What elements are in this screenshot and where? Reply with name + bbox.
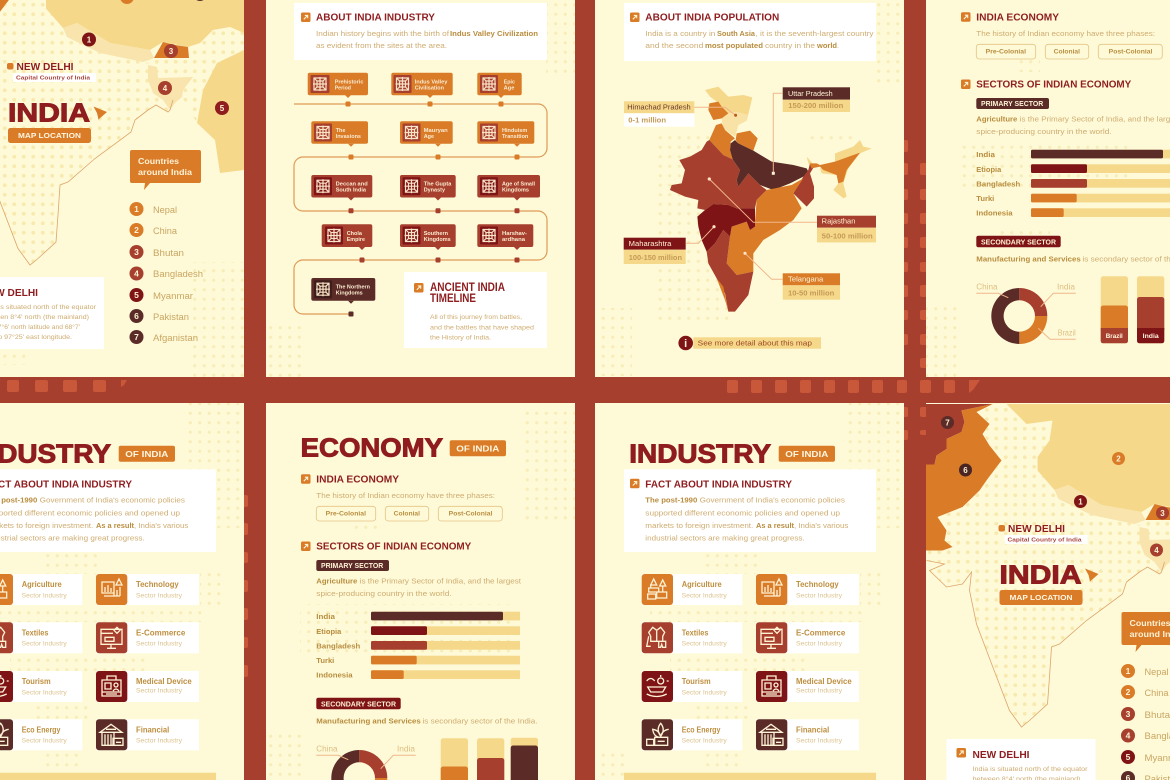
about population box: ABOUT INDIA POPULATION	[645, 12, 779, 24]
country list: Nepal	[1144, 667, 1168, 677]
fact box: , India's various	[134, 521, 189, 530]
card: Prehistoric Period: Prehistoric	[335, 79, 363, 85]
primary bar chart: Indonesia	[976, 209, 1013, 218]
primary sector	[976, 98, 1170, 136]
primary sector: Agriculture	[976, 115, 1017, 124]
primary bar chart: Etiopia	[316, 627, 342, 636]
country list: Myanmar	[153, 291, 193, 301]
card: Indus Valley	[391, 73, 453, 98]
sector cards	[642, 574, 859, 750]
panel: population	[595, 0, 904, 377]
secondary sector: SECONDARY SECTOR	[321, 701, 396, 708]
map markers: 3	[1160, 509, 1165, 518]
map markers: 6	[963, 466, 968, 475]
fact box: As a result	[96, 521, 135, 530]
panel: timeline	[266, 0, 575, 377]
label: Uttar Pradesh: 150-200 million	[788, 101, 844, 110]
donut chart	[976, 282, 1076, 344]
card: Chola Empire	[322, 224, 372, 250]
about population box: and the second	[645, 41, 703, 50]
card: Mauryan Age: Mauryan	[424, 128, 448, 134]
sector cards	[0, 574, 199, 750]
card: Chola Empire: Empire	[347, 237, 365, 243]
primary bar chart	[316, 612, 520, 680]
map markers: 1	[87, 36, 92, 44]
panel: industry left	[0, 403, 244, 780]
primary bar chart	[976, 150, 1170, 218]
label: Maharashtra	[624, 225, 716, 264]
country list: 1	[1126, 666, 1131, 676]
new delhi marker	[998, 523, 1088, 544]
india title: MAP LOCATION	[18, 131, 81, 140]
label: Telangana	[743, 252, 840, 300]
primary sector: spice-producing country in the world.	[316, 589, 452, 598]
new delhi marker: NEW DELHI	[1008, 523, 1065, 535]
primary sector: PRIMARY SECTOR	[981, 101, 1043, 108]
primary sector: spice-producing country in the world.	[976, 127, 1112, 136]
new delhi text box: India is situated north of the equator	[972, 766, 1088, 773]
card: Harshavardhana: ardhana	[502, 237, 526, 243]
ancient timeline box: TIMELINE	[430, 293, 476, 305]
new delhi marker: Capital Country of India	[1008, 538, 1083, 544]
primary sector: PRIMARY SECTOR	[321, 563, 383, 570]
donut chart	[316, 744, 416, 780]
country list: 4	[1126, 730, 1131, 740]
sector cards: Sector Industry	[796, 593, 842, 599]
sector cards: Eco Energy	[682, 726, 721, 735]
ancient timeline box: ANCIENT INDIA	[430, 282, 505, 294]
about population box: , it is the seventh-largest country	[756, 29, 874, 38]
secondary sector: Manufacturing and Services	[316, 717, 421, 726]
country list: 3	[134, 247, 139, 257]
donut chart: India	[397, 744, 416, 753]
sector cards: Eco Energy	[22, 726, 61, 735]
primary bar chart: Turki	[976, 194, 994, 203]
sector cards: Sector Industry	[22, 642, 67, 648]
sector cards: Sector Industry	[136, 593, 182, 599]
fact box: industrial sectors are making great progress.	[645, 534, 805, 543]
about industry box: ABOUT INDIA INDUSTRY	[316, 12, 435, 24]
card: Deccan and South India	[311, 175, 372, 200]
about population box: India is a country in	[645, 29, 715, 38]
donut chart: China	[976, 282, 998, 291]
card: The Gupta Dynasty: The Gupta	[424, 182, 452, 188]
country list: Bhutan	[153, 248, 184, 258]
map markers: 5	[220, 104, 225, 113]
about population box: country in the	[765, 41, 815, 50]
callout: countries: Countries	[1130, 618, 1170, 628]
label: Rajasthan: Rajasthan	[822, 219, 856, 226]
about industry box: as evident from the sites at the area.	[316, 41, 447, 50]
card: Hinduism Transition: Hinduism	[502, 128, 527, 134]
card: The Invasions: The	[336, 128, 345, 134]
map markers: 3	[169, 47, 174, 56]
sector cards: Financial	[136, 726, 169, 735]
india economy section	[301, 474, 502, 521]
sector cards: Medical Device	[796, 677, 852, 686]
callout: countries: Countries	[138, 156, 179, 166]
country list: Pakistan	[153, 312, 189, 322]
fact box: supported different economic policies and opened up	[645, 508, 840, 517]
fact box: As a result	[756, 521, 795, 530]
primary bar chart: Indonesia	[316, 671, 353, 680]
map markers: 1	[1078, 498, 1083, 506]
stacked bars: Brazil	[1106, 333, 1123, 340]
card: Harshavardhana: Harshav-	[502, 231, 527, 237]
country list	[1121, 664, 1170, 780]
country list: 2	[134, 225, 139, 235]
label: Himachad Pradesh: 0-1 million	[628, 115, 666, 124]
primary bar chart: Bangladesh	[316, 642, 361, 650]
industry title	[629, 438, 835, 468]
economy title: OF INDIA	[456, 443, 499, 453]
timeline path	[294, 102, 547, 316]
primary sector: is the Primary Sector of India, and the largest	[1020, 115, 1170, 124]
about industry box	[294, 3, 547, 60]
primary bar chart: Turki	[316, 656, 334, 665]
country list: China	[153, 226, 177, 236]
primary bar chart: India	[976, 150, 996, 159]
card: Age of Small Kingdoms	[477, 175, 540, 200]
secondary sector: is secondary sector of the India.	[422, 717, 538, 726]
india economy section: Pre-Colonial	[986, 48, 1026, 56]
sector cards: Textiles	[682, 628, 709, 637]
fact box: Government of India's economic policies	[40, 496, 185, 505]
label: Uttar Pradesh	[772, 87, 850, 175]
india region map	[926, 404, 1170, 727]
india region map	[0, 0, 244, 265]
new delhi text box	[0, 277, 104, 349]
map markers: 2	[1116, 454, 1121, 464]
card: Mauryan Age	[400, 121, 453, 147]
sector cards: Tourism	[22, 677, 51, 686]
callout: countries	[1122, 612, 1170, 652]
sector cards: Sector Industry	[22, 739, 67, 745]
industry title: OF INDIA	[125, 449, 168, 459]
sector cards: Technology	[796, 580, 839, 589]
panel: map location right	[926, 403, 1170, 780]
panel: industry of india	[595, 403, 904, 780]
card: The Northern Kingdoms: The Northern	[336, 285, 371, 291]
panel: economy top right	[926, 0, 1170, 377]
card: Epic Age: Epic	[504, 79, 515, 85]
map markers: 4	[1154, 546, 1159, 555]
india economy section: The history of Indian economy have three phases:	[316, 491, 495, 500]
sector cards: Sector Industry	[682, 690, 727, 696]
card: Harshavardhana	[477, 224, 533, 250]
country list: 5	[134, 290, 139, 300]
card: Southern Kingdoms: Southern	[424, 231, 449, 237]
stacked bars	[1101, 276, 1164, 343]
bottom strip	[0, 773, 216, 780]
sector cards: E-Commerce	[136, 628, 186, 637]
ancient timeline box: All of this journey from battles,	[430, 314, 522, 321]
india economy section: The history of Indian economy have three phases:	[976, 29, 1155, 38]
choropleth map of india	[670, 87, 872, 312]
donut chart: Brazil	[1058, 328, 1076, 337]
india economy section: INDIA ECONOMY	[316, 474, 399, 486]
card: Prehistoric Period	[308, 73, 368, 98]
card: Chola Empire: Chola	[347, 231, 363, 237]
new delhi marker: NEW DELHI	[16, 61, 74, 73]
india economy section: Colonial	[394, 510, 420, 518]
card: Indus Valley: Indus Valley	[415, 79, 448, 85]
india economy section: Post-Colonial	[449, 510, 493, 518]
donut chart: India	[1057, 282, 1076, 291]
sector cards: Sector Industry	[682, 642, 727, 648]
card: The Northern Kingdoms	[311, 278, 375, 304]
card: Hinduism Transition	[477, 121, 534, 147]
country list: 4	[134, 268, 139, 278]
label: Rajasthan	[708, 177, 876, 242]
country list	[130, 202, 203, 344]
ancient timeline box	[404, 272, 547, 348]
fact box: The post-1990	[645, 496, 697, 505]
country list: 2	[1126, 687, 1131, 697]
card: Epic Age: Age	[504, 85, 514, 91]
country list: 6	[134, 311, 139, 321]
film strip squares	[7, 140, 980, 677]
see more note: i	[684, 338, 687, 350]
country list: Nepal	[153, 205, 177, 215]
country list: China	[1144, 688, 1168, 698]
map markers	[941, 416, 1169, 556]
secondary sector	[316, 698, 538, 726]
ancient timeline box: the History of India.	[430, 334, 491, 342]
primary sector	[316, 560, 521, 598]
sector cards: Sector Industry	[682, 593, 727, 599]
industry title: OF INDIA	[785, 449, 828, 459]
india economy section: Post-Colonial	[1109, 48, 1153, 56]
callout: countries: around India	[138, 167, 192, 177]
sector cards: Sector Industry	[796, 688, 842, 694]
india economy section	[961, 12, 1162, 59]
ancient timeline box: and the battles that have shaped	[430, 324, 534, 332]
about population box: most populated	[705, 41, 763, 50]
sectors heading: SECTORS OF INDIAN ECONOMY	[976, 79, 1131, 91]
primary bar chart: Etiopia	[976, 165, 1002, 174]
country list: 1	[134, 204, 139, 214]
about population box: .	[837, 41, 839, 50]
card: Deccan and South India: South India	[336, 188, 367, 194]
card: The Gupta Dynasty: Dynasty	[424, 188, 446, 194]
industry title: INDUSTRY	[629, 438, 771, 468]
label: Rajasthan: 50-100 million	[822, 232, 873, 241]
about population box	[624, 3, 876, 61]
country list: 7	[134, 332, 139, 342]
map markers	[82, 0, 229, 115]
india title: INDIA	[8, 98, 90, 128]
card: Mauryan Age: Age	[424, 134, 434, 140]
primary sector: Agriculture	[316, 577, 357, 586]
sector cards: Textiles	[22, 628, 49, 637]
card: Prehistoric Period: Period	[335, 85, 352, 91]
about population box: world	[816, 41, 837, 50]
about industry box: Indian history begins with the birth of	[316, 29, 449, 38]
sector cards: Sector Industry	[136, 688, 182, 694]
secondary sector: Manufacturing and Services	[976, 255, 1081, 264]
panel: economy of india	[266, 403, 575, 780]
fact box: markets to foreign investment.	[645, 521, 753, 530]
india title: INDIA	[1000, 560, 1082, 590]
card: The Gupta Dynasty	[400, 175, 456, 200]
sector cards: Sector Industry	[22, 690, 67, 696]
card: Indus Valley: Civilisation	[415, 85, 445, 91]
callout: countries	[130, 150, 201, 190]
see more note	[678, 336, 821, 350]
country list: 3	[1126, 709, 1131, 719]
card: The Invasions: Invasions	[336, 134, 361, 140]
india title: MAP LOCATION	[1010, 593, 1072, 602]
fact box: FACT ABOUT INDIA INDUSTRY	[645, 478, 792, 490]
sector cards: Sector Industry	[136, 739, 182, 745]
card: Deccan and South India: Deccan and	[336, 182, 368, 188]
bottom strip	[624, 773, 876, 780]
label: Telangana: Telangana	[788, 277, 823, 284]
label: Himachad Pradesh	[624, 101, 737, 127]
sector cards: Sector Industry	[796, 642, 842, 648]
sector cards: Sector Industry	[682, 739, 727, 745]
stacked bars: India	[1143, 333, 1159, 340]
sectors heading	[961, 80, 1131, 89]
card: Epic Age	[477, 73, 522, 98]
country list: Bangladesh	[153, 269, 203, 279]
new delhi text box	[946, 739, 1096, 780]
sector cards: Technology	[136, 580, 179, 589]
sectors heading: SECTORS OF INDIAN ECONOMY	[316, 541, 471, 553]
about industry box: Indus Valley Civilization	[450, 29, 538, 38]
india economy section: Pre-Colonial	[326, 510, 366, 518]
india title	[8, 103, 107, 143]
india title	[1000, 560, 1098, 605]
country list: Afganistan	[153, 333, 198, 343]
new delhi marker: Capital Country of India	[16, 76, 91, 82]
india economy section: Colonial	[1054, 48, 1080, 56]
label: Maharashtra: Maharashtra	[629, 241, 672, 248]
panel: map location left	[0, 0, 244, 377]
primary bar chart: Bangladesh	[976, 180, 1021, 188]
fact box	[0, 469, 216, 552]
card: Age of Small Kingdoms: Age of Small	[502, 182, 535, 188]
economy title	[301, 433, 506, 463]
sector cards: Financial	[796, 726, 829, 735]
fact box	[624, 469, 876, 552]
card: Age of Small Kingdoms: Kingdoms	[502, 188, 529, 194]
map markers: 4	[163, 84, 168, 93]
india economy section: INDIA ECONOMY	[976, 12, 1059, 24]
card: Southern Kingdoms	[400, 224, 456, 250]
card: Southern Kingdoms: Kingdoms	[424, 237, 451, 243]
label: Telangana: 10-50 million	[788, 289, 835, 298]
map markers: 7	[945, 418, 950, 428]
economy title: ECONOMY	[301, 433, 443, 463]
sector cards: E-Commerce	[796, 628, 846, 637]
about population box: South Asia	[717, 29, 756, 38]
label: Maharashtra: 100-150 million	[629, 253, 682, 262]
card: The Invasions	[311, 121, 368, 147]
card: The Northern Kingdoms: Kingdoms	[336, 291, 363, 297]
stacked bars	[441, 738, 538, 780]
industry title	[0, 438, 175, 468]
sector cards: Tourism	[682, 677, 711, 686]
primary bar chart: India	[316, 612, 336, 621]
sector cards: Agriculture	[22, 580, 62, 589]
new delhi marker	[7, 61, 96, 82]
sector cards: Sector Industry	[796, 739, 842, 745]
country list: 5	[1126, 752, 1131, 762]
fact box: , India's various	[794, 521, 849, 530]
fact box: Government of India's economic policies	[700, 496, 845, 505]
donut chart: China	[316, 744, 338, 753]
label: Uttar Pradesh: Uttar Pradesh	[788, 91, 833, 98]
sector cards: Sector Industry	[22, 593, 67, 599]
label: Himachad Pradesh: Himachad Pradesh	[627, 105, 691, 112]
see more note: See more detail about this map	[698, 340, 812, 347]
sector cards: Medical Device	[136, 677, 192, 686]
secondary sector: SECONDARY SECTOR	[981, 239, 1056, 246]
new delhi text box: NEW DELHI	[972, 749, 1030, 761]
sector cards: Sector Industry	[136, 642, 182, 648]
card: Hinduism Transition: Transition	[502, 134, 529, 140]
secondary sector	[976, 236, 1170, 264]
sector cards: Agriculture	[682, 580, 722, 589]
primary sector: is the Primary Sector of India, and the largest	[360, 577, 521, 586]
